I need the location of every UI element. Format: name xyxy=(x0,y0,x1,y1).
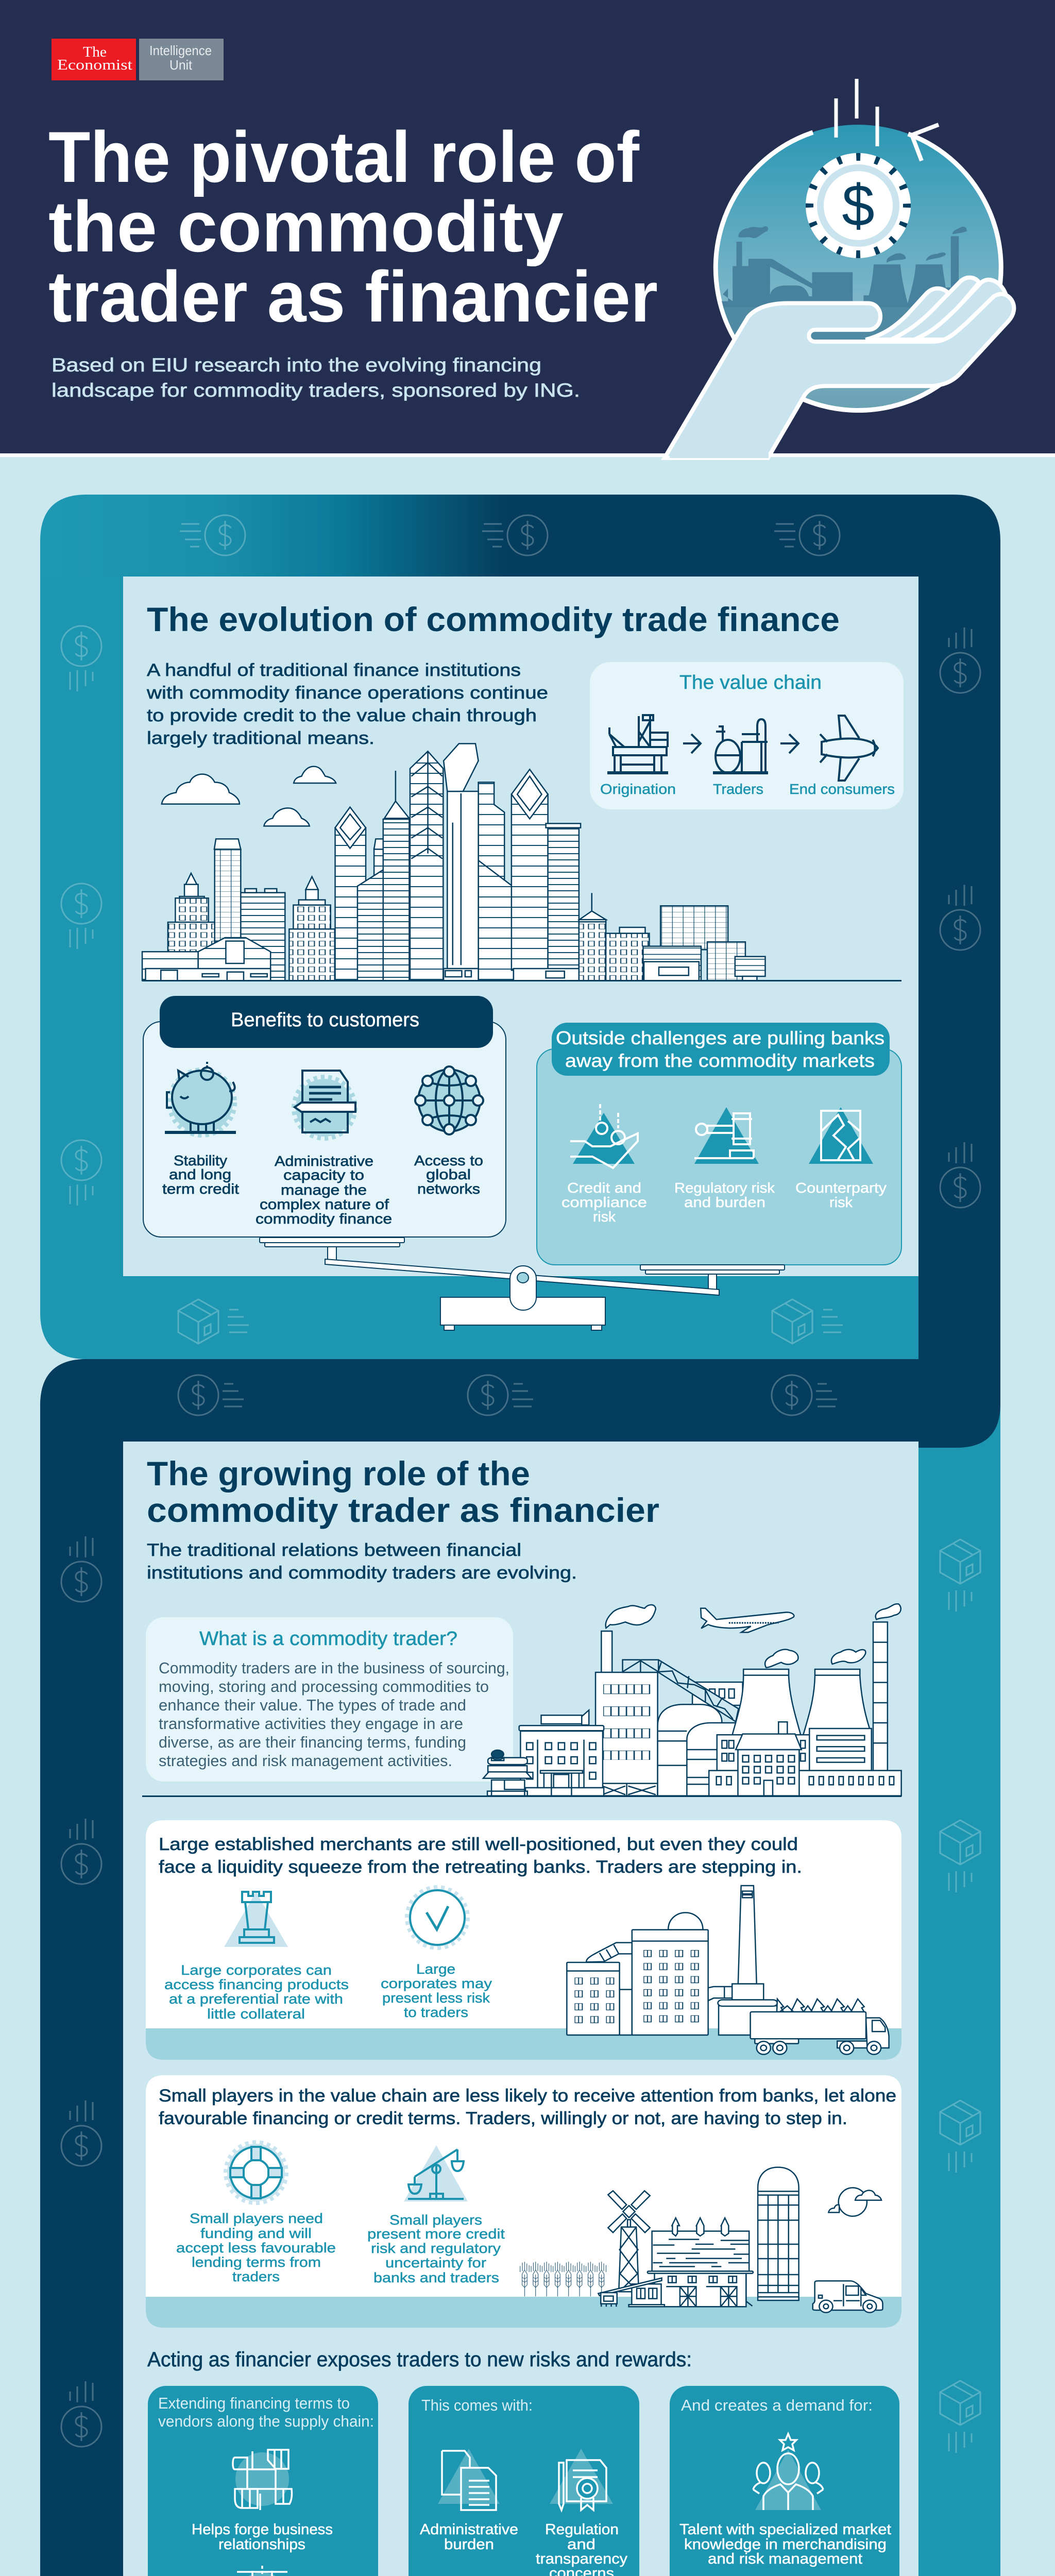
captions xyxy=(176,2211,505,2285)
captions: little collateral xyxy=(207,2006,305,2022)
benefit labels: manage the xyxy=(281,1182,367,1198)
captions: Large corporates can xyxy=(181,1962,332,1978)
icon: rook xyxy=(224,1892,288,1947)
card: this comes with: Administrative xyxy=(420,2521,518,2538)
captions: banks and traders xyxy=(373,2270,499,2285)
intro paragraph: A handful of traditional finance institutions xyxy=(147,660,521,680)
coin xyxy=(806,153,911,258)
ground line xyxy=(142,1795,901,1797)
challenge labels: Credit and xyxy=(567,1180,641,1196)
challenge labels: Regulatory risk xyxy=(674,1180,775,1196)
illustration: farm with windmill, barn, silo and van xyxy=(519,2167,882,2313)
subtitle: Based on EIU research into the evolving financing xyxy=(52,354,541,376)
benefit labels: Stability xyxy=(174,1153,227,1168)
callout: what is a commodity trader: transformative activities they engage in are xyxy=(159,1715,463,1733)
challenge labels: compliance xyxy=(561,1194,647,1210)
icon: oil rig xyxy=(607,715,668,773)
captions: access financing products xyxy=(164,1977,349,1992)
intro text: institutions and commodity traders are evolving. xyxy=(147,1563,577,1583)
heading: The growing role of the xyxy=(147,1454,530,1493)
statement: favourable financing or credit terms. Traders, willingly or not, are having to step in. xyxy=(159,2109,847,2128)
value chain box: The value chain xyxy=(679,672,822,693)
logo: The Economist Intelligence Unit: Unit xyxy=(169,57,193,73)
icon: piggy bank xyxy=(165,1062,236,1134)
callout: what is a commodity trader: What is a commodity trader? xyxy=(199,1628,457,1650)
panel: the growing role of the commodity trader as financier xyxy=(123,1442,918,2576)
icon: counterparty risk xyxy=(809,1107,873,1164)
statement: face a liquidity squeeze from the retreating banks. Traders are stepping in. xyxy=(159,1857,802,1877)
value chain box xyxy=(590,662,904,809)
benefit labels: networks xyxy=(417,1181,480,1197)
benefit labels: Administrative xyxy=(275,1153,373,1169)
captions: present less risk xyxy=(382,1990,490,2006)
arrow xyxy=(683,734,701,753)
card: benefits to customers xyxy=(143,996,506,1237)
benefit labels xyxy=(162,1153,483,1227)
captions: lending terms from xyxy=(192,2255,321,2270)
subtitle: landscape for commodity traders, sponsored by ING. xyxy=(52,380,580,401)
subheading: risks and rewards: Acting as financier exposes traders to new risks and rewards: xyxy=(147,2348,692,2371)
challenge labels: risk xyxy=(829,1194,853,1210)
card: creates a demand for xyxy=(670,2386,899,2576)
icon: inbox tray xyxy=(235,2566,289,2576)
icon: lifebuoy xyxy=(226,2143,286,2202)
captions: to traders xyxy=(404,2005,468,2020)
card: this comes with: transparency xyxy=(536,2551,628,2567)
decorative coin and parcel motifs on frames xyxy=(61,515,980,2576)
panel frame: section one right strip and section two top band xyxy=(40,495,1000,1448)
heading: commodity trader as financier xyxy=(147,1491,659,1529)
callout: what is a commodity trader: Commodity traders are in the business of sourcing, xyxy=(159,1659,509,1677)
icon: refinery xyxy=(713,719,768,773)
challenge labels xyxy=(561,1180,887,1225)
logo: The Economist Intelligence Unit xyxy=(52,39,224,80)
icon: document and pencil xyxy=(295,1071,355,1138)
panel: small players xyxy=(146,2075,901,2328)
card: extending financing terms xyxy=(148,2386,378,2576)
panel: large established merchants xyxy=(146,1820,901,2060)
title xyxy=(48,116,658,337)
intro paragraph: with commodity finance operations continue xyxy=(146,683,548,703)
heading: The evolution of commodity trade finance xyxy=(147,600,840,638)
callout: what is a commodity trader: enhance their value. The types of trade and xyxy=(159,1696,466,1714)
panel frame: section one xyxy=(40,495,918,1359)
intro text: The traditional relations between financial xyxy=(147,1540,521,1560)
card: this comes with xyxy=(409,2386,639,2576)
captions: accept less favourable xyxy=(176,2240,336,2256)
callout: what is a commodity trader: moving, storing and processing commodities to xyxy=(159,1677,489,1696)
illustration: factory and truck xyxy=(567,1886,889,2055)
value chain box: Traders xyxy=(713,781,763,797)
title: the commodity xyxy=(48,186,564,267)
card intro xyxy=(158,2394,374,2430)
icon: check badge xyxy=(407,1888,467,1947)
intro paragraph xyxy=(146,660,548,748)
coin: $ xyxy=(842,173,875,239)
illustration: city skyline xyxy=(142,743,765,980)
callout: what is a commodity trader xyxy=(146,1617,513,1782)
card: this comes with: and xyxy=(567,2536,595,2553)
callout: what is a commodity trader: strategies and risk management activities. xyxy=(159,1752,452,1770)
subtitle xyxy=(52,354,580,401)
illustration: industrial plant and plane xyxy=(483,1604,901,1796)
card: outside challenges xyxy=(537,1023,901,1265)
challenge labels: Counterparty xyxy=(795,1180,887,1196)
icon: linked hands xyxy=(233,2450,292,2510)
benefit labels: global xyxy=(426,1166,471,1182)
captions xyxy=(164,1961,492,2022)
logo: The Economist Intelligence Unit: Economist xyxy=(57,57,132,73)
card: extending financing terms: Helps forge business xyxy=(192,2521,333,2538)
header: away from the commodity markets xyxy=(565,1050,875,1071)
panel frame: section two backing xyxy=(40,1359,1000,2576)
captions: present more credit xyxy=(367,2226,505,2242)
arrow xyxy=(780,734,798,753)
title: The pivotal role of xyxy=(48,116,639,197)
captions: risk and regulatory xyxy=(371,2241,501,2256)
intro text xyxy=(147,1540,577,1583)
header xyxy=(160,996,493,1048)
logo: The Economist Intelligence Unit: Intelligence xyxy=(149,43,212,58)
benefit labels: Access to xyxy=(414,1153,483,1168)
challenge labels: and burden xyxy=(684,1194,765,1210)
benefit labels: complex nature of xyxy=(260,1196,389,1212)
captions: Small players need xyxy=(190,2211,323,2226)
challenge labels: risk xyxy=(593,1209,616,1225)
icon: scales xyxy=(404,2145,468,2201)
card intro: This comes with: xyxy=(421,2396,533,2414)
card intro: Extending financing terms to xyxy=(158,2394,350,2412)
captions: traders xyxy=(232,2269,280,2284)
illustration: balance scale tipping to benefits xyxy=(260,1238,785,1330)
icon: regulation document xyxy=(550,2449,613,2510)
heading xyxy=(147,1454,659,1529)
benefit labels: term credit xyxy=(162,1181,239,1197)
header xyxy=(552,1023,890,1076)
header: Outside challenges are pulling banks xyxy=(556,1027,884,1048)
ground line xyxy=(142,980,901,981)
captions: at a preferential rate with xyxy=(169,1991,343,2007)
statement xyxy=(159,1835,802,1877)
logo: The Economist Intelligence Unit: The xyxy=(83,44,107,60)
intro paragraph: to provide credit to the value chain through xyxy=(147,706,537,725)
header banner xyxy=(0,0,1055,458)
card: creates a demand for: and risk management xyxy=(708,2551,862,2567)
value chain box: End consumers xyxy=(789,781,895,797)
callout: what is a commodity trader: diverse, as are their financing terms, funding xyxy=(159,1733,466,1751)
captions: corporates may xyxy=(381,1976,492,1991)
statement: Large established merchants are still well-positioned, but even they could xyxy=(159,1835,798,1854)
card: extending financing terms: relationships xyxy=(218,2536,305,2553)
statement xyxy=(159,2086,896,2128)
icon: talent xyxy=(753,2434,823,2510)
icon: credit and compliance risk xyxy=(570,1104,638,1168)
benefit labels: capacity to xyxy=(283,1167,364,1183)
icon: regulatory risk xyxy=(694,1107,759,1164)
captions: Small players xyxy=(389,2212,482,2228)
intro paragraph: largely traditional means. xyxy=(147,728,375,748)
header: Benefits to customers xyxy=(231,1009,419,1031)
icon: plane xyxy=(820,716,878,781)
panel: the evolution of commodity trade finance xyxy=(123,577,918,1330)
card: creates a demand for: knowledge in merchandising xyxy=(684,2536,887,2553)
statement: Small players in the value chain are less likely to receive attention from banks, let alone xyxy=(159,2086,896,2106)
captions: funding and will xyxy=(200,2226,312,2241)
benefit labels: commodity finance xyxy=(256,1211,392,1227)
benefit labels: and long xyxy=(169,1166,231,1182)
captions: Large xyxy=(416,1961,455,1977)
captions: uncertainty for xyxy=(385,2255,486,2270)
card: this comes with: burden xyxy=(444,2536,494,2553)
card: this comes with: Regulation xyxy=(545,2521,619,2538)
icon: documents xyxy=(438,2449,500,2510)
card intro: And creates a demand for: xyxy=(681,2396,873,2414)
card intro: vendors along the supply chain: xyxy=(158,2412,374,2430)
icon: global network xyxy=(415,1066,483,1134)
value chain box: Origination xyxy=(600,781,676,797)
title: trader as financier xyxy=(48,256,658,337)
illustration: hand holding globe with coin and factories xyxy=(665,79,1014,458)
card: creates a demand for: Talent with specialized market xyxy=(679,2521,891,2538)
